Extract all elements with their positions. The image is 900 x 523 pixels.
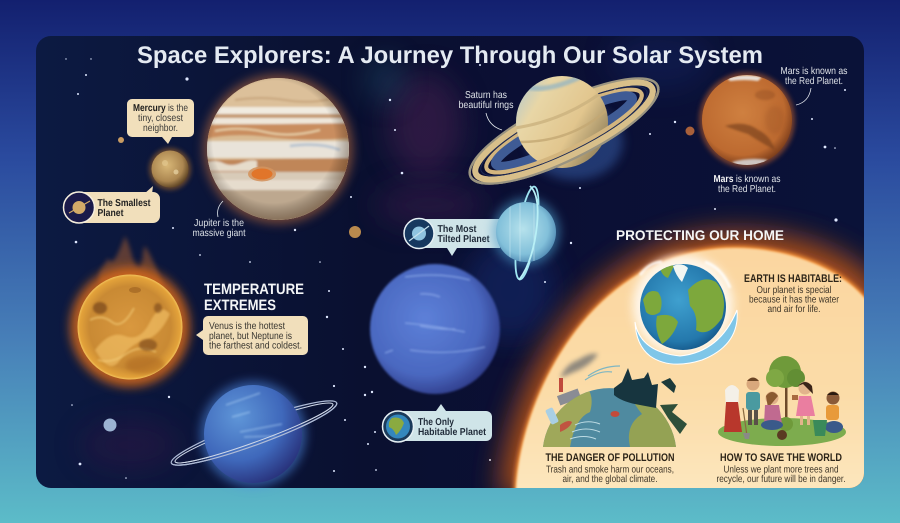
note: Jupiter: massive giant [192,228,246,239]
label: The Only Habitable Planet: Habitable Planet [418,427,487,438]
moon [686,126,694,136]
callout: Venus and Neptune: planet, but Neptune is [209,331,292,342]
planet: Venus [70,236,190,387]
planet: Jupiter [200,74,360,224]
text: The danger of pollution: air, and the global climate. [562,474,658,485]
text: Earth is habitable: Our planet is special [756,285,832,296]
heading: Temperature Extremes: TEMPERATURE [204,281,304,298]
text: The danger of pollution: Trash and smoke harm our oceans, [546,464,674,476]
label: The Smallest Planet: Planet [98,208,124,219]
note: Mars bottom: Mars is known as [714,174,780,185]
note: Mars bottom [714,174,780,195]
note: Mars top [780,66,848,105]
label: The Only Habitable Planet: The Only [418,417,454,428]
label: The Most Tilted Planet: Tilted Planet [438,234,490,245]
planet: Neptune [370,264,500,394]
label: The Only Habitable Planet [382,404,492,442]
planet: Neptune with rings [167,381,341,487]
heading: Temperature Extremes [204,281,304,314]
text: Earth is habitable: EARTH IS HABITABLE: [744,273,842,285]
heading: Temperature Extremes: EXTREMES [204,297,276,314]
moon [104,418,116,432]
nebula clouds [80,30,710,471]
dome: protecting our home [500,232,880,496]
planet: Uranus with ring [492,185,560,281]
planet: Mars [699,72,795,168]
title: Space Explorers: A Journey Through Our Solar System [137,42,763,69]
text: The danger of pollution: THE DANGER OF POLLUTION [546,452,675,464]
note: Mars top: Mars is known as [780,66,848,77]
callout: Mercury: Mercury is the [133,103,188,114]
note: Mars top: the Red Planet. [785,76,843,87]
note: Saturn: Saturn has [465,90,507,101]
heading: Protecting Our Home: PROTECTING OUR HOME [616,227,784,243]
moon [118,137,124,143]
callout: Mercury: neighbor. [143,123,178,134]
note: Mars bottom: the Red Planet. [718,184,776,195]
text: How to save the world: Unless we plant more trees and [724,464,838,476]
text: How to save the world: recycle, our future will be in danger. [716,474,846,485]
callout: Venus and Neptune: the farthest and coldest. [209,340,302,352]
text: Earth is habitable: because it has the water [749,294,840,306]
callout: Venus and Neptune: Venus is the hottest [209,321,285,332]
text: Earth is habitable [744,273,842,315]
callout: Mercury: tiny, closest [138,113,183,124]
text: The danger of pollution [546,452,675,485]
planet: Saturn with rings [468,76,660,185]
label: The Most Tilted Planet [404,218,500,256]
note: Saturn: beautiful rings [458,100,514,111]
label: The Smallest Planet [64,186,160,223]
text: How to save the world: HOW TO SAVE THE WORLD [720,452,842,464]
planet: Mercury [149,148,191,190]
moon [349,226,361,238]
stars [65,58,846,479]
note: Jupiter [192,201,246,239]
label: The Smallest Planet: The Smallest [98,198,151,209]
note: Jupiter: Jupiter is the [194,218,244,229]
label: The Most Tilted Planet: The Most [438,224,477,235]
callout: Venus and Neptune [196,316,308,355]
illustration: kids planting trees [718,356,846,446]
illustration: pollution [543,354,687,447]
text: How to save the world [716,452,846,485]
icon: Earth with water [633,255,737,364]
callout: Mercury [127,99,194,144]
text: Earth is habitable: and air for life. [768,304,820,315]
note: Saturn [458,90,514,130]
